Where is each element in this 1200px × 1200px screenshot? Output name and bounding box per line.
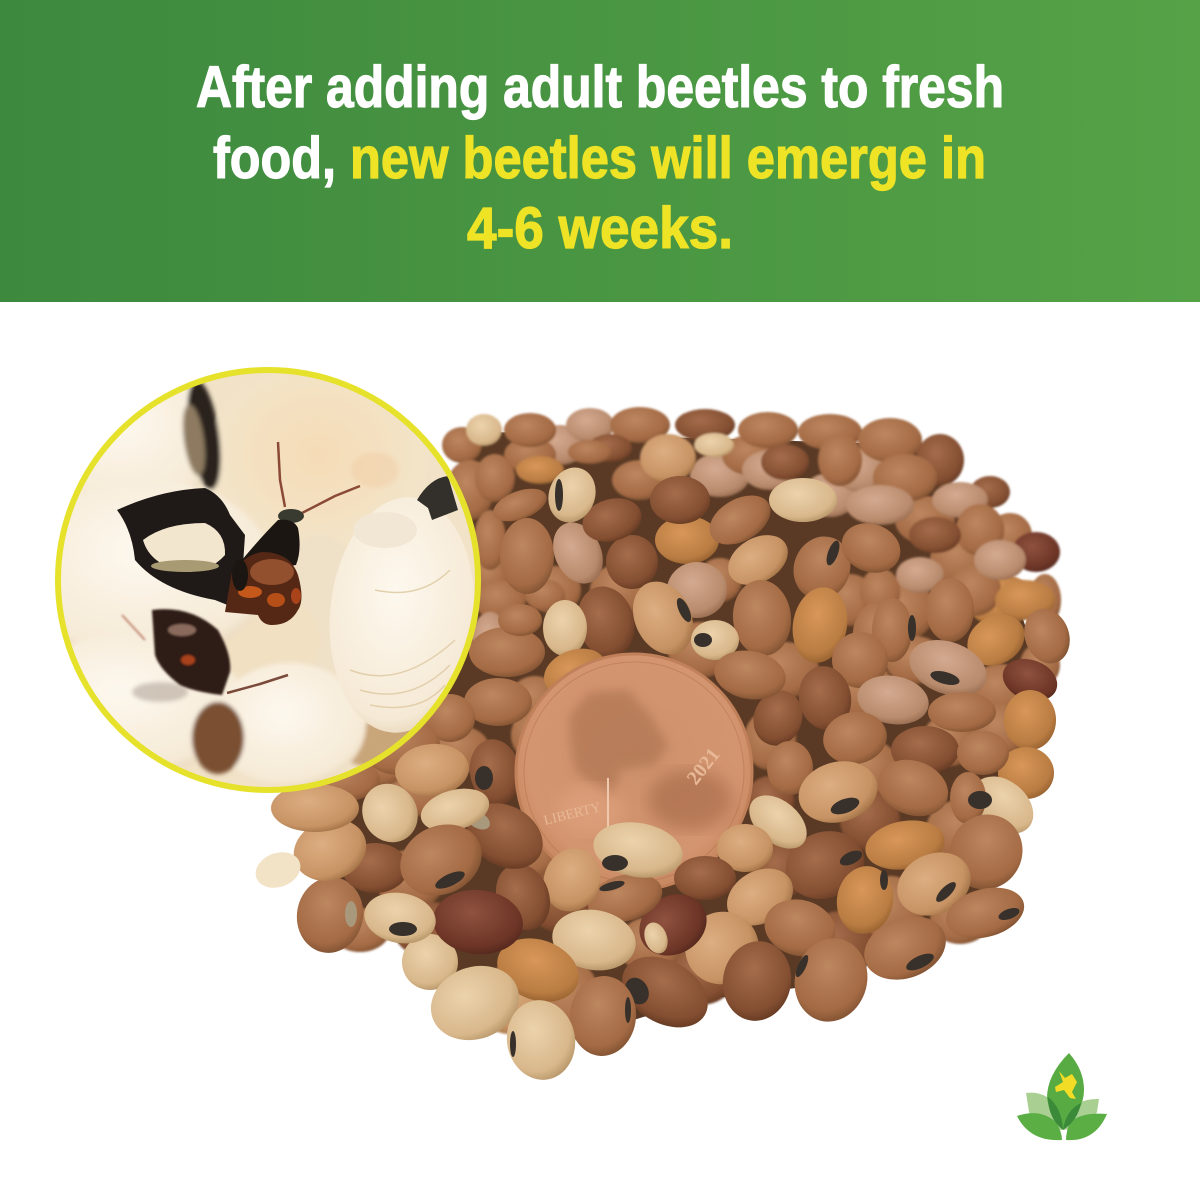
seed wrinkles bbox=[350, 570, 455, 708]
bottom leaves bbox=[1017, 1113, 1062, 1140]
title: new beetles will emerge in bbox=[350, 126, 986, 191]
front beans bbox=[251, 750, 1044, 1085]
blurred cream beans bbox=[61, 382, 410, 782]
abdomen bbox=[225, 552, 302, 625]
frog bbox=[1055, 1071, 1077, 1099]
magnified beetle inset bbox=[55, 367, 481, 793]
coin date: 2021 bbox=[683, 744, 725, 789]
seed hilum under beetle bbox=[117, 488, 245, 610]
beetle bbox=[225, 442, 360, 625]
coin: one cent bbox=[516, 654, 752, 890]
filler beans bbox=[330, 425, 1061, 1040]
wear marks bbox=[648, 770, 732, 830]
inset ring bbox=[58, 370, 478, 790]
inner leaves bbox=[1048, 1097, 1063, 1130]
title: food, bbox=[213, 126, 336, 191]
head bbox=[278, 509, 304, 523]
title bbox=[196, 55, 1004, 261]
coin motto: LIBERTY bbox=[542, 800, 603, 829]
thorax bbox=[243, 520, 300, 566]
bean pile bbox=[300, 407, 1077, 1050]
logo bbox=[1017, 1053, 1107, 1140]
back leaves bbox=[1026, 1093, 1062, 1130]
header banner bbox=[0, 0, 1200, 302]
title: After adding adult beetles to fresh bbox=[196, 55, 1004, 120]
portrait bbox=[570, 690, 668, 800]
title: 4-6 weeks. bbox=[467, 196, 733, 261]
second beetle bbox=[122, 609, 230, 695]
centre leaf bbox=[1047, 1053, 1084, 1130]
seed eye bbox=[417, 476, 458, 520]
antennae bbox=[278, 442, 285, 507]
